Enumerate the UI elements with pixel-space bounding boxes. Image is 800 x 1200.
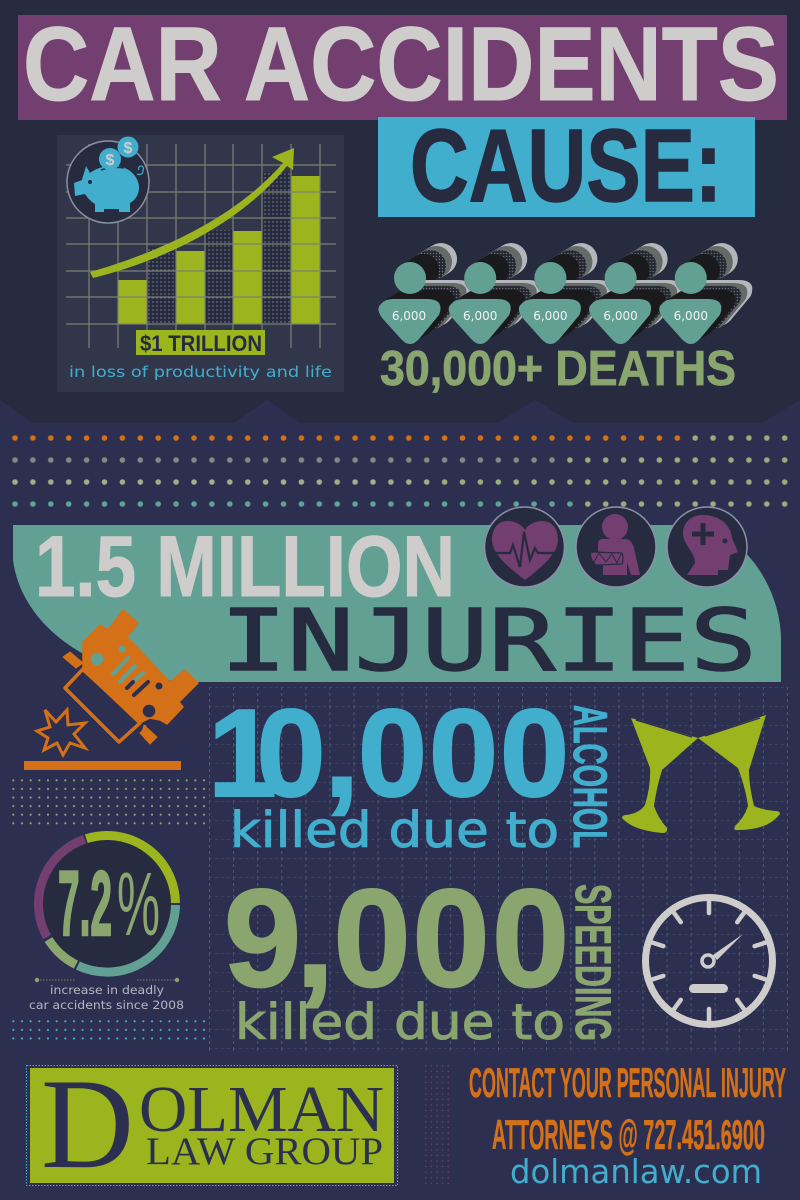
person 4 (589, 259, 682, 344)
sage dot grid (9, 776, 208, 828)
icon: martini glasses (622, 715, 780, 833)
speeding stat: SPEEDING (565, 884, 621, 1041)
donut: 7.2 percent: 7.2 (58, 853, 112, 955)
icon: piggy bank: $ (106, 152, 115, 169)
deaths heading: 30,000+ DEATHS (380, 342, 736, 396)
alcohol stat: killed due to (230, 802, 559, 859)
icon: overturned car (37, 610, 198, 755)
cause banner: CAUSE: (410, 108, 722, 223)
logo: Dolman Law Group: OLMAN (139, 1073, 384, 1146)
contact text: dolmanlaw.com (510, 1152, 762, 1191)
donut caption: car accidents since 2008 (29, 998, 184, 1012)
icon: heart (484, 507, 564, 587)
million heading: 1.5 MILLION (35, 519, 455, 615)
icon: injured person (576, 507, 656, 587)
speeding stat: killed due to (235, 994, 565, 1051)
green bars (118, 176, 320, 324)
growth arrow (90, 148, 294, 278)
contact text (469, 1059, 786, 1191)
grid panel (209, 687, 788, 1051)
chart caption: in loss of productivity and life (69, 363, 332, 381)
panel: trillion chart (57, 135, 344, 392)
donut: 7.2 percent: % (117, 855, 160, 955)
icon: piggy bank: $ (124, 140, 133, 157)
alcohol stat: 10,000 (208, 685, 569, 823)
person 3: 6,000 (533, 309, 568, 323)
donut caption: increase in deadly (50, 983, 164, 997)
person 2 (449, 259, 542, 344)
person 5: 6,000 (674, 309, 708, 323)
person 5 (659, 259, 752, 344)
logo: Dolman Law Group (26, 1052, 398, 1195)
logo: Dolman Law Group: LAW GROUP (146, 1130, 383, 1173)
speeding stat: 9,000 (224, 861, 569, 1016)
dotted rows (6, 434, 794, 508)
icon: head with cross (667, 507, 747, 587)
person 3 (519, 259, 612, 344)
person 4: 6,000 (603, 309, 638, 323)
person 1 (378, 259, 472, 344)
people row: six thousand each (378, 259, 752, 344)
injuries heading: INJURIES (220, 592, 757, 691)
donut: 7.2 percent (38, 835, 175, 972)
person 2: 6,000 (463, 309, 497, 323)
pink dot column (423, 1063, 453, 1186)
icon: piggy bank (67, 136, 149, 223)
dotted background bars (147, 172, 291, 324)
donut caption (29, 978, 184, 1012)
alcohol stat (208, 685, 617, 859)
person 1: 6,000 (392, 309, 426, 323)
injuries banner (13, 519, 781, 691)
trillion label: $1 TRILLION (140, 331, 262, 356)
orange ground bar (24, 761, 181, 770)
blue dot grid (9, 1017, 208, 1043)
icon: speedometer (646, 898, 772, 1024)
logo: Dolman Law Group: D (41, 1052, 134, 1195)
icon: impact star (37, 710, 85, 755)
alcohol stat: ALCOHOL (564, 705, 617, 848)
